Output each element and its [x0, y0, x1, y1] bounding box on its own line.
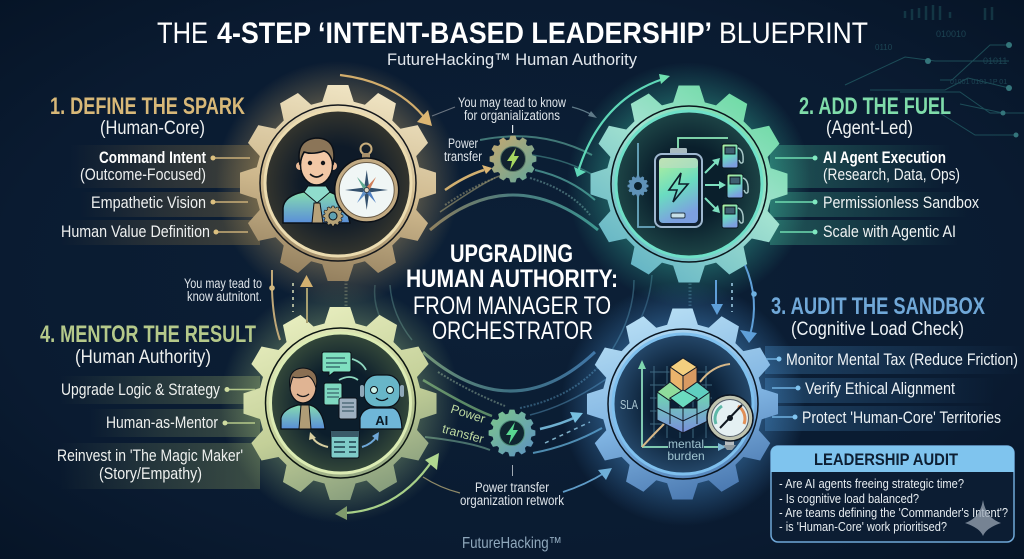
- list: step 4: Reinvest in 'The Magic Maker': [57, 447, 243, 465]
- center connector arcs: [346, 136, 690, 453]
- arrow: gear 2 double headed: [572, 74, 670, 177]
- list: step 1: Command Intent: [99, 149, 206, 167]
- list: step 4: [57, 381, 255, 483]
- chart axis label: SLA: SLA: [620, 398, 638, 412]
- icon: person with compass: [283, 138, 399, 226]
- note: bottom: organization retwork: [460, 493, 564, 508]
- arrow: network to gear 3: [563, 412, 612, 492]
- subheading: step 4: (Human Authority): [75, 347, 211, 368]
- list: step 1: [61, 149, 250, 241]
- list: step 4: (Story/Empathy): [99, 465, 202, 483]
- arrow: gear 2 to gear 3: [711, 265, 757, 343]
- panel: step 4 text: [40, 321, 256, 483]
- label: top power transfer: transfer: [444, 149, 482, 164]
- footer brand: FutureHacking™: [462, 535, 562, 552]
- label: slanted power transfer: [441, 402, 487, 446]
- circuit pattern: 01011: [983, 56, 1007, 66]
- note: left: know autnitont.: [187, 289, 262, 304]
- list: step 2: [775, 149, 980, 241]
- panel: step 2 text: [775, 93, 980, 241]
- circuit pattern: 0110: [875, 43, 893, 52]
- list: step 1: Empathetic Vision: [91, 194, 206, 212]
- icon: human and AI collaboration: AI: [375, 413, 388, 428]
- heading: step 4: 4. MENTOR THE RESULT: [40, 321, 256, 348]
- icon: battery and fuel pumps: [628, 138, 748, 228]
- circuit pattern: [845, 5, 1024, 138]
- icon: bottom power transfer gear: [489, 410, 535, 456]
- list: step 4: Human-as-Mentor: [106, 414, 218, 432]
- title: 4-STEP ‘INTENT-BASED LEADERSHIP’: [217, 17, 712, 50]
- note: top: for organializations: [464, 108, 560, 123]
- label: slanted power transfer: transfer: [441, 422, 485, 446]
- audit questions: - is 'Human-Core' work prioritised?: [779, 519, 947, 534]
- heading: step 1: 1. DEFINE THE SPARK: [50, 93, 245, 120]
- chart axis label: mental burden: burden: [667, 449, 705, 463]
- list: step 1: Human Value Definition: [61, 223, 210, 241]
- note: top: You may tead to know: [458, 95, 566, 110]
- arrow: gear 1 to gear 2: [340, 75, 455, 126]
- note: top: [458, 95, 566, 133]
- circuit pattern: 010010: [936, 29, 966, 39]
- subheading: step 2: (Agent-Led): [826, 118, 913, 139]
- panel: leadership audit: [771, 446, 1014, 542]
- icon: human and AI collaboration: [281, 352, 404, 458]
- panel: step 3 text: [766, 293, 1018, 427]
- note: left: You may tead to: [184, 276, 262, 291]
- subheading: step 1: (Human-Core): [100, 118, 205, 139]
- note: bottom: [460, 465, 564, 508]
- title: BLUEPRINT: [719, 17, 868, 50]
- center heading: UPGRADING: [450, 240, 573, 268]
- list: step 2: (Research, Data, Ops): [823, 166, 960, 184]
- icon: compass: [335, 144, 399, 222]
- panel: step 4 gear: [220, 283, 460, 523]
- audit questions: - Are AI agents freeing strategic time?: [779, 476, 964, 491]
- list: step 2: AI Agent Execution: [823, 149, 946, 167]
- panel: step 2 gear: [567, 62, 811, 306]
- icon: cubes chart with gauge: [620, 358, 753, 463]
- title: THE: [157, 17, 208, 50]
- list: step 1: (Outcome-Focused): [80, 166, 206, 184]
- circuit pattern: 01001 0101 1P 01: [950, 79, 1007, 86]
- center heading: ORCHESTRATOR: [432, 317, 593, 345]
- note: bottom: Power transfer: [475, 480, 549, 495]
- panel: step 1 text: [50, 93, 250, 241]
- list: step 3: Verify Ethical Alignment: [805, 380, 955, 398]
- arrow: gear 3 to gear 4 double headed: [335, 453, 460, 520]
- arrow: gear 4 to gear 1: [269, 270, 313, 340]
- label: slanted power transfer: Power: [449, 402, 487, 426]
- list: step 3: [766, 351, 1018, 427]
- center heading: HUMAN AUTHORITY:: [406, 265, 618, 293]
- audit heading: LEADERSHIP AUDIT: [814, 450, 959, 469]
- subheading: step 3: (Cognitive Load Check): [791, 319, 964, 340]
- text bands: [60, 145, 1024, 489]
- subtitle: FutureHacking™ Human Authority: [387, 50, 637, 69]
- icon: top power transfer gear: [482, 136, 536, 182]
- label: top power transfer: Power: [448, 136, 478, 151]
- panel: step 3 gear: [561, 282, 805, 526]
- list: step 2: Permissionless Sandbox: [823, 194, 980, 212]
- center heading: [406, 240, 618, 345]
- audit header: [771, 446, 1014, 472]
- chart axis label: mental burden: mental: [668, 437, 704, 451]
- audit questions: - Is cognitive load balanced?: [779, 491, 919, 506]
- label: top power transfer: [444, 136, 482, 164]
- heading: step 2: 2. ADD THE FUEL: [799, 93, 951, 120]
- center heading: FROM MANAGER TO: [413, 292, 611, 320]
- list: step 4: Upgrade Logic & Strategy: [61, 381, 221, 399]
- icon: sparkle: [965, 500, 1001, 536]
- list: step 2: Scale with Agentic AI: [823, 223, 956, 241]
- audit questions: [779, 476, 1008, 534]
- note: left: [184, 276, 262, 304]
- panel: step 1 gear: [216, 61, 460, 305]
